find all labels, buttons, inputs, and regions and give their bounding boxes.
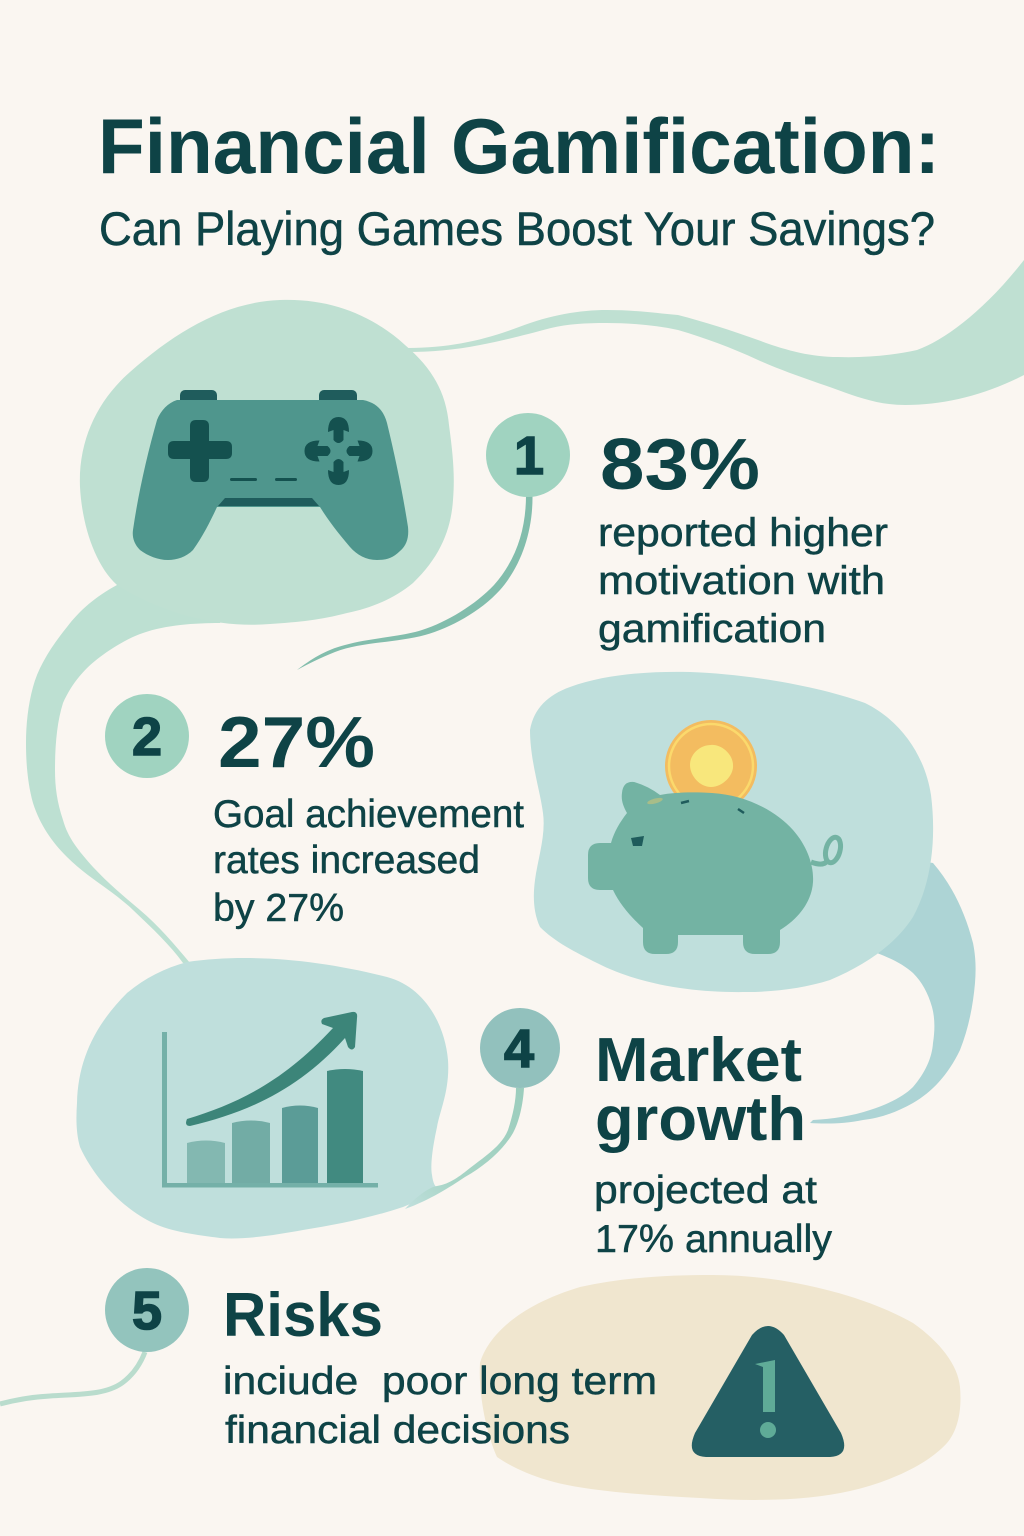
stat description 2: by 27% — [213, 887, 344, 930]
title: Financial Gamification: — [98, 102, 940, 190]
decorative wave: top right ribbon — [408, 260, 1024, 405]
badge 4 — [480, 1008, 560, 1088]
pig body — [588, 782, 813, 954]
decorative ribbon: left tail — [26, 570, 240, 963]
chart: rising bars and arrow — [162, 1012, 378, 1188]
stat description 5 — [223, 1360, 657, 1452]
stat description 1: reported higher — [598, 511, 888, 555]
coin slot marks — [681, 801, 744, 813]
icon: warning triangle — [692, 1326, 844, 1457]
badge 2 — [105, 694, 189, 778]
stat description 2: Goal achievement — [213, 793, 524, 836]
stat 2: goal achievement — [105, 694, 524, 930]
icon: game controller — [133, 390, 408, 560]
stat description 1: gamification — [598, 607, 826, 651]
stat heading market growth — [595, 1026, 806, 1154]
growth arrow — [186, 1012, 357, 1126]
icon: piggy bank with coin — [588, 720, 843, 954]
panel: growth chart blob — [76, 958, 448, 1238]
subtitle: Can Playing Games Boost Your Savings? — [99, 202, 935, 255]
stat description 4: 17% annually — [595, 1218, 833, 1261]
badge 5: 5 — [132, 1281, 162, 1341]
stat description 1 — [598, 511, 888, 651]
pig tail — [811, 836, 843, 864]
badge 1: 1 — [514, 426, 544, 486]
action buttons — [304, 417, 372, 485]
decorative ribbon: right tail — [810, 860, 976, 1124]
stat description 4: projected at — [594, 1169, 817, 1212]
stat 4: market growth — [480, 1008, 833, 1261]
stat value 83%: 83% — [600, 425, 760, 505]
stat heading risks: Risks — [223, 1281, 383, 1350]
d-pad — [168, 420, 232, 482]
badge 1 — [486, 413, 570, 497]
stat description 1: motivation with — [598, 559, 885, 603]
stat description 2 — [213, 793, 524, 930]
panel: game controller blob — [80, 300, 454, 625]
stat description 5: inciude poor long term — [223, 1360, 657, 1403]
badge 5 — [105, 1268, 189, 1352]
stat heading market growth: growth — [595, 1085, 806, 1154]
stat heading market growth: Market — [595, 1026, 802, 1095]
badge 2: 2 — [132, 707, 162, 767]
stat description 5: financial decisions — [225, 1409, 570, 1452]
stat 1: motivation — [486, 413, 888, 651]
connector: circle 4 — [405, 1088, 524, 1209]
pig eye — [631, 836, 644, 846]
stat description 4 — [594, 1169, 833, 1261]
panel: warning blob — [480, 1275, 960, 1500]
connector: circle 1 — [297, 495, 533, 670]
connector: circle 5 — [0, 1352, 145, 1404]
stat value 27%: 27% — [218, 703, 375, 783]
stat description 2: rates increased — [213, 839, 480, 882]
panel: piggy bank blob — [530, 672, 933, 992]
badge 4: 4 — [504, 1019, 534, 1079]
stat 5: risks — [105, 1268, 657, 1452]
coin — [665, 720, 757, 812]
